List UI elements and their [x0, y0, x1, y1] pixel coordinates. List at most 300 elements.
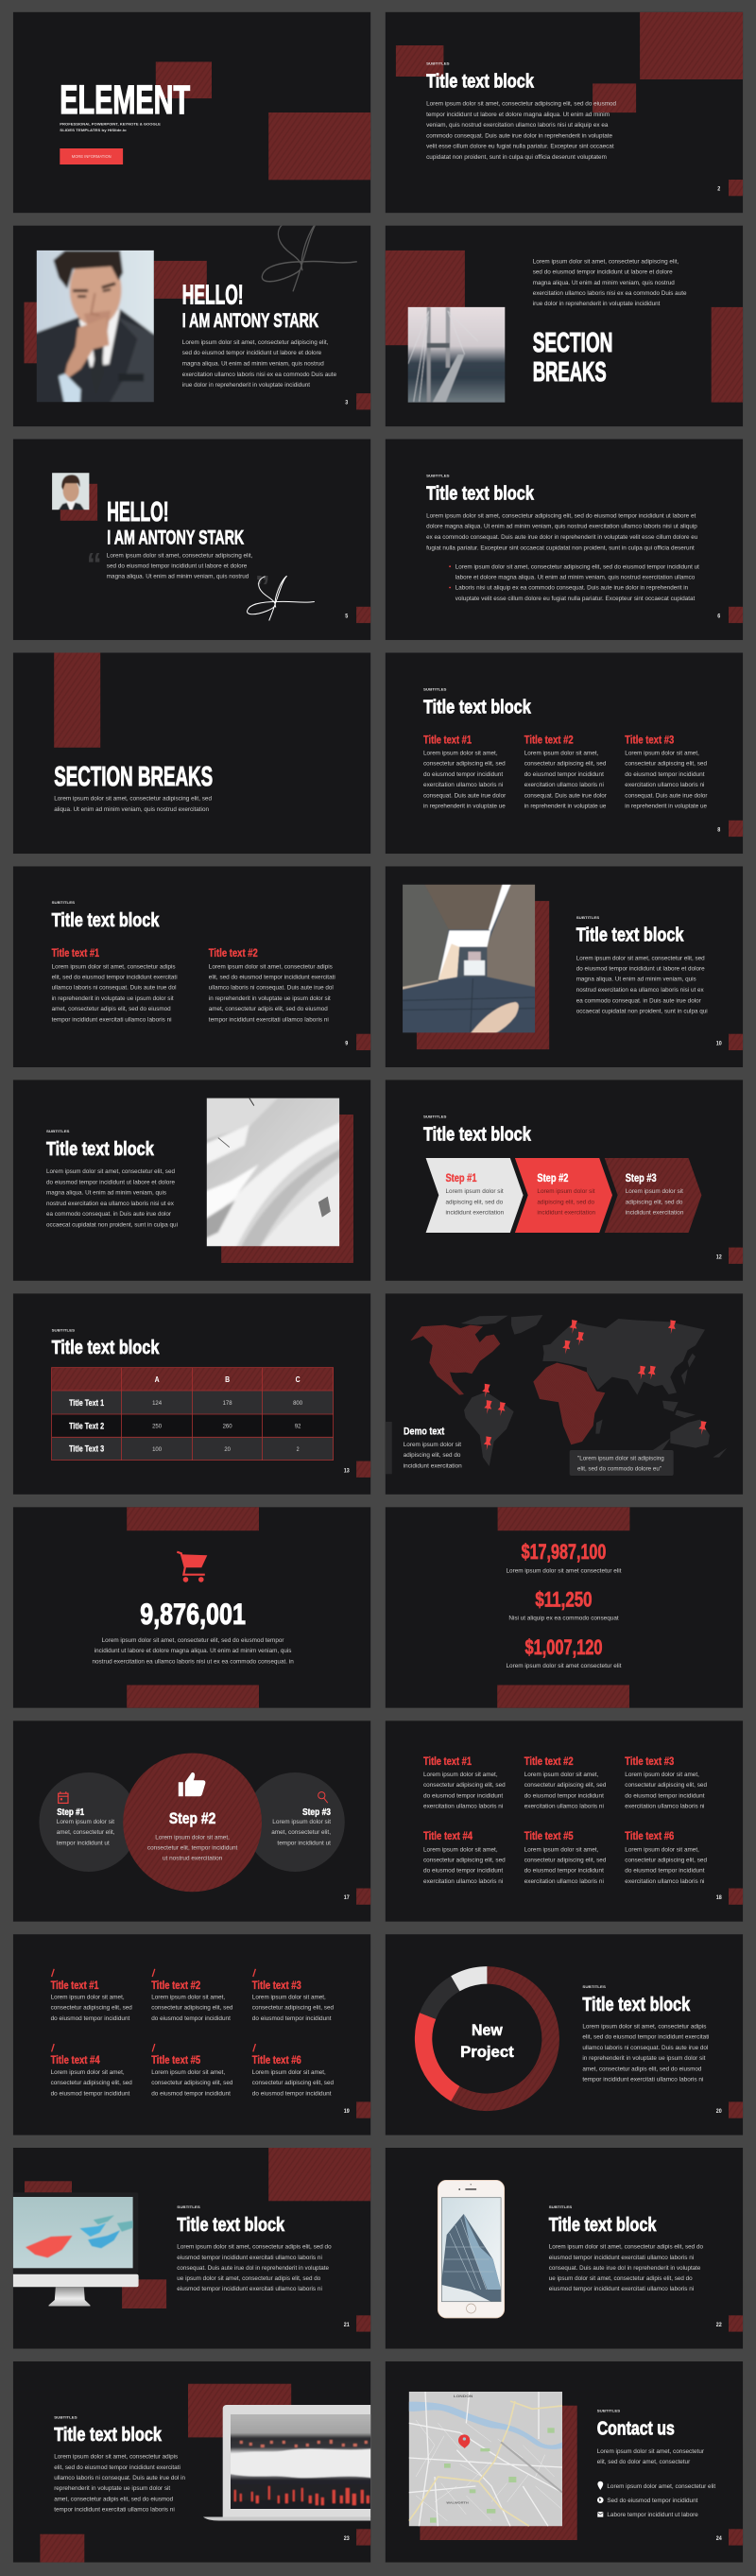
body text [182, 339, 337, 389]
item 2: exercitation ullamco laboris ni [524, 1804, 604, 1810]
table: Title Text 3 [69, 1444, 104, 1454]
slide 11: text left photo right [13, 1080, 370, 1281]
quote text: magna aliqua. Ut enim ad minim veniam, quis nostrud [107, 574, 249, 580]
circle: step 3: amet, consectetur elit, [271, 1829, 331, 1836]
body text: ullamco laboris ni consequat. Duis aute irue dol [582, 2045, 708, 2051]
item 3 [252, 1969, 334, 2022]
quote text [107, 552, 253, 580]
column 1: in reprehenderit in voluptate ue [423, 804, 506, 810]
body text: nostrud exercitation ea ullamco laboris nisi ut ex ea commodo consequat. in [92, 1658, 294, 1665]
table: A [155, 1374, 160, 1384]
item 2 [151, 1969, 233, 2022]
item 6: consectetur adipiscing elit, sed [625, 1858, 707, 1864]
heading: Title text block [549, 2214, 657, 2236]
item 1: exercitation ullamco laboris ni [423, 1804, 503, 1810]
heading: SECTION BREAKS [54, 762, 213, 792]
item 2: consectetur adipiscing elit, sed [151, 2005, 233, 2012]
page tab [344, 1461, 370, 1478]
item 4: consectetur adipiscing elit, sed [51, 2080, 132, 2086]
circle: step 2: Lorem ipsum dolor sit amet, [155, 1834, 230, 1841]
column 3: consectetur adipiscing elit, sed [625, 761, 707, 768]
signature: grey [262, 221, 357, 291]
chevron: step 3: incididunt exercitation [626, 1210, 684, 1217]
body text: cupidatat non proident, sunt in culpa qui officia deserunt voluptatem [426, 154, 607, 161]
icon: shopping cart [177, 1552, 207, 1582]
body text: veniam, quis nostrud exercitation ullamco laboris nisi ut aliquip ex ea [426, 122, 609, 129]
page tab [716, 2101, 743, 2118]
contact: address: Lorem ipsum dolor amet, consectetur elit [607, 2483, 715, 2490]
column 2: amet, consectetur adipis elit, sed do eiusmod [209, 1006, 328, 1012]
figure 1: $17,987,100 [522, 1540, 606, 1564]
table: Title Text 2 [69, 1421, 104, 1430]
table: 250 [152, 1423, 163, 1429]
page tab: 3 [345, 401, 349, 406]
item 6: consectetur adipiscing elit, sed [252, 2080, 334, 2086]
slide 9: two columns [13, 866, 370, 1067]
body text: Lorem ipsum dolor sit amet, consectetur elit, sed [46, 1168, 175, 1175]
item 3: Title text #3 [252, 1980, 301, 1992]
column 3: Lorem ipsum dolor sit amet, [625, 751, 699, 757]
page tab: 2 [717, 187, 721, 193]
page tab: 10 [716, 1041, 722, 1046]
body text: magna aliqua. Ut enim ad minim veniam, quis [46, 1190, 166, 1197]
item 5: Title text #5 [151, 2055, 201, 2066]
bridge photo [408, 306, 505, 403]
page tab [717, 821, 743, 837]
chevron: step 2: Step #2 [537, 1173, 568, 1184]
item 5: Lorem ipsum dolor sit amet, [524, 1846, 599, 1853]
body text: do eiusmod tempor incididunt ut labore et dolore [576, 966, 705, 973]
item 5: consectetur adipiscing elit, sed [524, 1858, 607, 1864]
item 6: Lorem ipsum dolor sit amet, [252, 2069, 326, 2076]
chevron: step 3 [605, 1158, 701, 1233]
page tab: 13 [344, 1468, 350, 1474]
item 6: do eiusmod tempor incididunt [252, 2090, 332, 2097]
button [60, 148, 123, 164]
item 2 [524, 1756, 607, 1810]
item 1: do eiusmod tempor incididunt [423, 1792, 503, 1799]
page tab [345, 607, 370, 623]
laptop mockup [203, 2405, 377, 2520]
item 5: consectetur adipiscing elit, sed [151, 2080, 233, 2086]
column 1: consequat. Duis aute irue dolor [423, 792, 506, 799]
tagline: SLIDES TEMPLATES by HiSlide.io [60, 129, 128, 132]
body text: elit, sed do eiusmod tempor incididunt exercitati [54, 2464, 180, 2471]
slide 1: cover [13, 12, 370, 213]
item 5: do eiusmod tempor incididunt [524, 1868, 604, 1875]
body text: ue ipsum dolor sit amet, consectetur adipis elit, sed do [177, 2275, 321, 2282]
table: 2 [297, 1446, 300, 1453]
column 2: in reprehenderit in voluptate ue [524, 804, 607, 810]
slide 23: laptop mockup [13, 2361, 377, 2563]
chevron: step 3: adipiscing elit, sed do [626, 1200, 683, 1206]
table [52, 1368, 334, 1461]
circle: step 2: Step #2 [169, 1810, 215, 1827]
heading: Title text block [582, 1994, 691, 2015]
item 1: consectetur adipiscing elit, sed [51, 2005, 132, 2012]
page tab [344, 2315, 370, 2332]
column 2: Lorem ipsum dolor sit amet, consectetur adipis [209, 963, 333, 970]
architecture photo [202, 1094, 344, 1252]
item 5 [524, 1831, 607, 1885]
page tab: 20 [716, 2109, 722, 2115]
item 4: consectetur adipiscing elit, sed [423, 1858, 506, 1864]
body text: Lorem ipsum dolor sit amet, consectetur adipiscing elit, [182, 339, 329, 346]
chevron: step 2: adipiscing elit, sed do [537, 1200, 595, 1206]
subtitle: SUBTITLES [426, 61, 450, 65]
item 3: exercitation ullamco laboris ni [625, 1804, 705, 1810]
page tab: 6 [717, 614, 721, 620]
item 6: exercitation ullamco laboris ni [625, 1878, 705, 1885]
body text: incididunt ut labore et dolore magna aliqua. Ut enim ad minim veniam, quis [94, 1648, 291, 1654]
body text [426, 101, 617, 161]
slide 3: hello with portrait [13, 221, 370, 426]
phone mockup [438, 2180, 505, 2318]
desktop monitor mockup [13, 2192, 139, 2307]
item 4: Lorem ipsum dolor sit amet, [423, 1846, 498, 1853]
chevron: step 2 [515, 1158, 612, 1233]
body text [92, 1637, 294, 1665]
street map: WALWORTH [446, 2500, 469, 2504]
body text: sed do eiusmod tempor incididunt ut labore et dolore [533, 269, 673, 276]
body text: Lorem ipsum dolor sit amet, consectetur adipis elit, sed do [177, 2244, 332, 2250]
item 3: do eiusmod tempor incididunt [252, 2015, 332, 2022]
body text: consequat. Duis aute irue dol in reprehenderit in voluptate [177, 2265, 329, 2272]
item 2: do eiusmod tempor incididunt [151, 2015, 231, 2022]
column 1: exercitation ullamco laboris ni [423, 782, 503, 788]
item 6: Title text #6 [625, 1831, 674, 1842]
item 4: do eiusmod tempor incididunt [51, 2090, 130, 2097]
item 1 [423, 1756, 506, 1810]
slide 10: photo left text right [386, 866, 743, 1067]
body text: elit, sed do eiusmod tempor incididunt exercitati [582, 2034, 709, 2041]
item 2: Title text #2 [151, 1980, 200, 1992]
body text: ullamco laboris ni consequat. Duis aute irue dol in [54, 2475, 185, 2481]
column 1: elit, sed do eiusmod tempor incididunt exercitati [52, 974, 178, 980]
body text: tempor incididunt exercitati ullamco laboris ni [582, 2077, 703, 2083]
chevron: step 1: incididunt exercitation [446, 1210, 505, 1217]
table: 20 [224, 1446, 231, 1453]
street map [409, 2392, 562, 2526]
heading: section breaks [533, 332, 612, 382]
bullet list [449, 563, 699, 602]
portrait thumbnail [52, 473, 89, 510]
quote text: sed do eiusmod tempor incididunt ut labore et dolore [107, 562, 248, 569]
column 3: consequat. Duis aute irue dolor [625, 792, 707, 799]
chevron: step 3: Lorem ipsum dolor sit [626, 1188, 683, 1195]
item 3: Lorem ipsum dolor sit amet, [625, 1772, 699, 1778]
table: B [225, 1374, 230, 1384]
body text: Lorem ipsum dolor sit amet, consectetur adipiscing elit, [533, 259, 679, 266]
figure 3 [507, 1635, 622, 1669]
item 3: consectetur adipiscing elit, sed [625, 1782, 707, 1789]
column 2: consectetur adipiscing elit, sed [524, 761, 607, 768]
body text: irue dolor in reprehenderit in voluptate incididunt [533, 301, 661, 307]
table: 800 [293, 1400, 303, 1407]
chevron: step 3: Step #3 [626, 1173, 657, 1184]
body text [177, 2244, 332, 2292]
subtitle: SUBTITLES [549, 2205, 573, 2209]
page tab: 21 [344, 2323, 350, 2328]
body text: ea commodo consequat. in Duis aute irue dolor [46, 1211, 171, 1218]
body text: Lorem ipsum dolor sit amet, consectetur adipiscing elit, sed do eiusmod tempor incididunt ut labore et [426, 513, 696, 520]
item 1: Title text #1 [423, 1756, 472, 1768]
key number: 9,876,001 [140, 1597, 246, 1631]
page tab [716, 2315, 743, 2332]
slide 18: six columns [386, 1720, 743, 1922]
item 6: do eiusmod tempor incididunt [625, 1868, 705, 1875]
page tab [717, 607, 743, 623]
chevron: step 1: Step #1 [446, 1173, 477, 1184]
item 6 [625, 1831, 707, 1885]
tagline: PROFESSIONAL POWERPOINT, KEYNOTE & GOOGLE [60, 123, 162, 127]
column 1: Lorem ipsum dolor sit amet, [423, 751, 498, 757]
chevron: step 2: Lorem ipsum dolor sit [537, 1188, 595, 1195]
body text: tempor incididunt ut labore et dolore magna aliqua. Ut enim ad minim [426, 112, 610, 118]
body text [576, 955, 708, 1015]
body text: occaecat cupidatat non proident, sunt in culpa qui [576, 1009, 708, 1015]
item 1: Lorem ipsum dolor sit amet, [423, 1772, 498, 1778]
body text: ea commodo consequat. in Duis aute irue dolor [576, 997, 701, 1004]
subtitle: SUBTITLES [52, 901, 76, 905]
figure 3: Lorem ipsum dolor sit amet consectetur elit [507, 1663, 622, 1669]
item 3: consectetur adipiscing elit, sed [252, 2005, 334, 2012]
contact: address [597, 2481, 715, 2490]
body text: in reprehenderit in voluptate ue ipsum dolor sit [582, 2055, 706, 2062]
heading: Title text block [52, 909, 160, 931]
item 5: exercitation ullamco laboris ni [524, 1878, 604, 1885]
subtitle: SUBTITLES [423, 1115, 447, 1118]
slide 21: desktop mockup [13, 2148, 370, 2349]
world map [410, 1315, 727, 1466]
slide 22: phone mockup [386, 2148, 743, 2349]
column 1 [423, 735, 506, 810]
subtitle: SUBTITLES [423, 688, 447, 692]
table: C [296, 1374, 301, 1384]
slide 4: section breaks with photo [386, 226, 743, 426]
body text: amet, consectetur adipis elit, sed do eiusmod [54, 2496, 174, 2503]
slide 13: table [13, 1293, 370, 1495]
body text: eiusmod tempor incididunt exercitati ullamco laboris ni [177, 2286, 322, 2292]
item 6: Title text #6 [252, 2055, 301, 2066]
body text: eiusmod tempor incididunt exercitati ullamco laboris ni [549, 2255, 694, 2261]
column 3 [625, 735, 707, 810]
slide 17: three circles [13, 1720, 370, 1922]
item 2: do eiusmod tempor incididunt [524, 1792, 604, 1799]
item 1: consectetur adipiscing elit, sed [423, 1782, 506, 1789]
heading: Title text block [423, 1123, 531, 1145]
body text: Lorem ipsum dolor sit amet, consectetur elit, sed do eiusmod tempor [102, 1637, 284, 1644]
heading: Title text block [54, 2424, 162, 2446]
circle: step 3: Step #3 [302, 1807, 331, 1818]
heading: section breaks: SECTION [533, 328, 612, 358]
column 1: amet, consectetur adipis elit, sed do eiusmod [52, 1006, 171, 1012]
column 1: ullamco laboris ni consequat. Duis aute irue dol [52, 985, 177, 992]
column 2: exercitation ullamco laboris ni [524, 782, 604, 788]
demo text: Lorem ipsum dolor sit [404, 1442, 461, 1448]
body text: reprehenderit in voluptate ue ipsum dolor sit [54, 2485, 170, 2492]
page tab [716, 1248, 743, 1264]
heading: hello: HELLO! [107, 497, 169, 527]
item 2: Title text #2 [524, 1756, 574, 1768]
item 5: Title text #5 [524, 1831, 574, 1842]
body text: eiusmod tempor incididunt exercitati ullamco laboris ni [549, 2286, 694, 2292]
column 1: Title text #1 [52, 948, 100, 960]
column 1: tempor incididunt exercitati ullamco laboris ni [52, 1016, 172, 1023]
donut label: Project [460, 2044, 514, 2061]
body text: aliqua. Ut enim ad minim veniam, quis nostrud exercitation [54, 806, 209, 813]
item 5 [151, 2044, 233, 2097]
item 3: do eiusmod tempor incididunt [625, 1792, 705, 1799]
slide 5: hello with quote [13, 439, 370, 640]
body text: eiusmod tempor incididunt exercitati ullamco laboris ni [177, 2255, 322, 2261]
page tab [716, 1889, 743, 1905]
item 6 [252, 2044, 334, 2097]
body text: irue dolor in reprehenderit in voluptate incididunt [182, 382, 310, 389]
circle: step 1: tempor incididunt ut [57, 1840, 110, 1846]
circle: step 2: ut nostrud exercitation [163, 1856, 223, 1862]
quote mark: closing: ” [255, 569, 270, 603]
heading: name: I AM ANTONY STARK [182, 310, 318, 332]
item 4: Title text #4 [51, 2055, 100, 2066]
heading: Title text block [426, 482, 534, 505]
subtitle: SUBTITLES [46, 1130, 70, 1133]
slide 7: section breaks [13, 652, 370, 854]
item 1: Title text #1 [51, 1980, 99, 1992]
slide 19: six items with slashes [13, 1934, 370, 2135]
column 1 [52, 948, 178, 1023]
body text: consequat. Duis aute irue dol in reprehenderit in voluptate [549, 2265, 701, 2272]
body text: exercitation ullamco laboris nisi ex ea commodo Duis aute [182, 372, 337, 378]
figure 1 [507, 1540, 622, 1574]
column 2: Lorem ipsum dolor sit amet, [524, 751, 599, 757]
page tab [345, 1034, 370, 1050]
body text [54, 796, 212, 813]
donut label: New [472, 2022, 503, 2039]
column 2: consequat. Duis aute irue dolor [524, 792, 607, 799]
item 2: Lorem ipsum dolor sit amet, [151, 1995, 225, 2001]
body text [426, 513, 698, 551]
body text: nostrud exercitation ea ullamco laboris nisi ut ex [576, 987, 705, 994]
circle: step 1: amet, consectetur elit, [57, 1829, 115, 1836]
body text: Lorem ipsum dolor sit amet, consectetur adipiscing elit, sed [54, 796, 212, 803]
map pins [481, 1320, 708, 1451]
body text [597, 2448, 704, 2465]
item 4: do eiusmod tempor incididunt [423, 1868, 503, 1875]
column 1: Lorem ipsum dolor sit amet, consectetur adipis [52, 963, 176, 970]
subtitle: SUBTITLES [177, 2205, 201, 2209]
column 2: ullamco laboris ni consequat. Duis aute irue dol [209, 985, 334, 992]
item 5: do eiusmod tempor incididunt [151, 2090, 231, 2097]
contact: email: Labore tempor incididunt ut labore [607, 2512, 698, 2518]
demo text: Demo text [404, 1426, 445, 1438]
slide 24: contact [386, 2361, 743, 2563]
slide 15: key figure [13, 1507, 370, 1708]
heading: section breaks: BREAKS [533, 357, 607, 388]
page tab [717, 180, 743, 196]
item 1 [51, 1969, 132, 2022]
figure 2: Nisi ut aliquip ex ea commodo consequat [508, 1616, 619, 1622]
column 3: in reprehenderit in voluptate ue [625, 804, 707, 810]
callout: "Lorem ipsum dolor sit adipiscing [577, 1456, 664, 1462]
bullet list: labore et dolore magna aliqua. Ut enim ad minim veniam, quis nostrud exercitation ullamco [455, 575, 696, 581]
body text: nostrud exercitation ea ullamco laboris nisi ut ex [46, 1201, 175, 1207]
callout: elit, sed do commodo dolore eu" [577, 1466, 662, 1473]
heading: hello: HELLO! [182, 281, 244, 311]
circle: step 3: Lorem ipsum dolor sit [272, 1819, 331, 1825]
page tab: 24 [716, 2536, 722, 2542]
body text: Lorem ipsum dolor sit amet, consectetur elit, sed [576, 955, 705, 961]
column 2: do eiusmod tempor incididunt [524, 771, 604, 778]
body text: magna aliqua. Ut enim ad minim veniam, quis nostrud [533, 280, 675, 286]
item 1: Lorem ipsum dolor sit amet, [51, 1995, 125, 2001]
page tab: 8 [717, 828, 721, 834]
donut label [460, 2022, 514, 2061]
body text: elit, sed do dolor amet, consectetur [597, 2459, 690, 2465]
circle: step 3: tempor incididunt ut [277, 1840, 331, 1846]
table: 178 [223, 1400, 232, 1407]
item 3 [625, 1756, 707, 1810]
body text [54, 2454, 185, 2513]
quote text: Lorem ipsum dolor sit amet, consectetur adipiscing elit, [107, 552, 253, 559]
body text [533, 259, 687, 307]
chevron: step 1 [426, 1158, 524, 1233]
contact: website: Sed do eiusmod tempor incididunt [607, 2498, 698, 2504]
item 5: Lorem ipsum dolor sit amet, [151, 2069, 225, 2076]
chevron: step 1: adipiscing elit, sed do [446, 1200, 504, 1206]
chevron: step 1: Lorem ipsum dolor sit [446, 1188, 504, 1195]
item 4: exercitation ullamco laboris ni [423, 1878, 503, 1885]
body text: ue ipsum dolor sit amet, consectetur adipis elit, sed do [549, 2275, 693, 2282]
slide 16: three figures [386, 1507, 743, 1708]
page tab [716, 2529, 743, 2546]
callout [570, 1438, 674, 1476]
street map: LONDON [454, 2394, 473, 2398]
item 1: do eiusmod tempor incididunt [51, 2015, 130, 2022]
figure 1: Lorem ipsum dolor sit amet consectetur elit [507, 1567, 622, 1574]
body text: ex ea commodo consequat. Duis aute irue dolor in reprehenderit in voluptate velit esse cillum dolore eu [426, 534, 698, 541]
body text [46, 1168, 178, 1229]
body text: Lorem ipsum dolor sit amet, consectetur adipis [54, 2454, 178, 2460]
item 3: Title text #3 [625, 1756, 674, 1768]
column 3: do eiusmod tempor incididunt [625, 771, 705, 778]
page tab [345, 393, 370, 409]
page tab: 23 [344, 2536, 350, 2542]
column 1: Title text #1 [423, 735, 472, 747]
column 3: Title text #3 [625, 735, 674, 747]
item 3: Lorem ipsum dolor sit amet, [252, 1995, 326, 2001]
body text: fugiat nulla pariatur. Excepteur sint occaecat cupidatat non proident, sunt in culpa qui officia deserunt [426, 545, 695, 551]
column 2: in reprehenderit in voluptate ue ipsum dolor sit [209, 995, 331, 1002]
column 2: elit, sed do eiusmod tempor incididunt exercitati [209, 974, 335, 980]
item 2: Lorem ipsum dolor sit amet, [524, 1772, 599, 1778]
page tab: 19 [344, 2109, 350, 2115]
column 1: in reprehenderit in voluptate ue ipsum dolor sit [52, 995, 174, 1002]
body text: Lorem ipsum dolor sit amet, consectetur [597, 2448, 704, 2455]
signature: white [248, 576, 315, 620]
slide 12: process chevrons [386, 1080, 743, 1281]
body text: do eiusmod tempor incididunt ut labore et dolore [46, 1180, 176, 1186]
heading: name: I AM ANTONY STARK [107, 527, 244, 548]
column 2: Title text #2 [209, 948, 258, 960]
subtitle: SUBTITLES [54, 2415, 77, 2419]
page tab: 22 [716, 2323, 722, 2328]
column 2 [209, 948, 335, 1023]
tagline [60, 123, 162, 132]
page tab [344, 1889, 370, 1905]
item 4 [51, 2044, 132, 2097]
page tab: 18 [716, 1895, 722, 1901]
